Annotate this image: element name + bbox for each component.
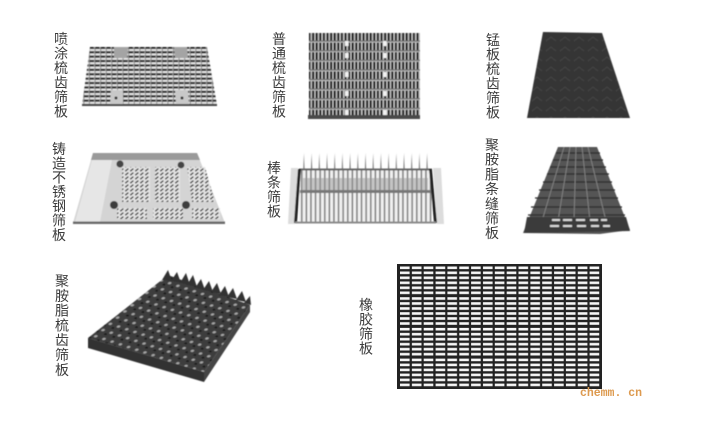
- label: 橡胶筛板: 筛: [359, 326, 373, 342]
- label: 铸造不锈钢筛板: 造: [52, 155, 66, 171]
- watermark: chemm.cn: chemm. cn: [580, 387, 642, 400]
- label: 聚胺脂梳齿筛板: 梳: [55, 317, 69, 333]
- label: 普通梳齿筛板: 筛: [272, 89, 286, 105]
- panel: rubber screen plate: [359, 264, 602, 389]
- label: 聚胺脂梳齿筛板: 胺: [55, 288, 69, 304]
- label: 普通梳齿筛板: 通: [272, 46, 286, 62]
- label: 锰板梳齿筛板: 板: [486, 104, 500, 120]
- label: 橡胶筛板: 橡: [359, 297, 373, 313]
- label: 锰板梳齿筛板: 锰: [486, 32, 500, 48]
- label: 喷涂梳齿筛板: 齿: [54, 74, 68, 90]
- label: 棒条筛板: 板: [267, 204, 281, 220]
- label: 棒条筛板: 棒: [267, 160, 281, 176]
- panel: bar screen plate: [267, 152, 444, 224]
- label: 喷涂梳齿筛板: 涂: [54, 46, 68, 62]
- label: 喷涂梳齿筛板: 板: [54, 104, 68, 120]
- label: 普通梳齿筛板: 梳: [272, 60, 286, 76]
- label: 聚胺脂条缝筛板: 板: [485, 225, 499, 241]
- label: 聚胺脂梳齿筛板: 聚: [55, 273, 69, 289]
- label: 锰板梳齿筛板: 齿: [486, 76, 500, 92]
- label: 聚胺脂条缝筛板: 胺: [485, 152, 499, 168]
- label: 聚胺脂条缝筛板: 脂: [485, 166, 499, 182]
- label: 聚胺脂条缝筛板: 聚: [485, 137, 499, 153]
- label: 铸造不锈钢筛板: 铸: [52, 141, 66, 157]
- label: 喷涂梳齿筛板: 筛: [54, 89, 68, 105]
- image: slotted polyurethane plate: [523, 147, 630, 234]
- label: 棒条筛板: 筛: [267, 189, 281, 205]
- panel: cast stainless steel screen plate: [52, 141, 225, 243]
- label: 铸造不锈钢筛板: 筛: [52, 212, 66, 228]
- label: 喷涂梳齿筛板: 喷: [54, 31, 68, 47]
- image: manganese plate: [527, 32, 630, 118]
- label: 聚胺脂条缝筛板: 筛: [485, 210, 499, 226]
- label: 铸造不锈钢筛板: 不: [52, 170, 66, 186]
- label: 聚胺脂梳齿筛板: 筛: [55, 347, 69, 363]
- label: 普通梳齿筛板: 普: [272, 31, 286, 47]
- label: 普通梳齿筛板: 齿: [272, 74, 286, 90]
- label: 聚胺脂条缝筛板: 条: [485, 181, 499, 197]
- label: 铸造不锈钢筛板: 板: [52, 227, 66, 243]
- panel: polyurethane slotted screen plate: [485, 137, 630, 241]
- image: sprayed plate: [82, 47, 217, 106]
- panel: polyurethane comb-tooth screen plate: [55, 270, 251, 382]
- image: rubber plate: [397, 264, 602, 389]
- label: 棒条筛板: 条: [267, 174, 281, 190]
- image: stainless plate: [73, 153, 225, 224]
- label: 锰板梳齿筛板: 筛: [486, 90, 500, 106]
- label: 橡胶筛板: 胶: [359, 312, 373, 328]
- label: 铸造不锈钢筛板: 钢: [52, 198, 66, 214]
- image: polyurethane comb plate: [88, 270, 251, 382]
- label: 普通梳齿筛板: 板: [272, 104, 286, 120]
- label: 喷涂梳齿筛板: 梳: [54, 60, 68, 76]
- panel: manganese plate comb-tooth screen plate: [486, 32, 630, 120]
- panel: sprayed comb-tooth screen plate: [54, 31, 217, 120]
- label: 铸造不锈钢筛板: 锈: [52, 184, 66, 200]
- label: 锰板梳齿筛板: 板: [486, 46, 500, 62]
- label: 聚胺脂梳齿筛板: 板: [55, 362, 69, 378]
- image: bar plate: [288, 152, 444, 224]
- label: 聚胺脂条缝筛板: 缝: [485, 196, 499, 212]
- panel: standard comb-tooth screen plate: [272, 31, 420, 120]
- label: 橡胶筛板: 板: [359, 340, 373, 356]
- image: standard plate: [308, 33, 420, 119]
- label: 聚胺脂梳齿筛板: 脂: [55, 303, 69, 319]
- label: 锰板梳齿筛板: 梳: [486, 61, 500, 77]
- label: 聚胺脂梳齿筛板: 齿: [55, 332, 69, 348]
